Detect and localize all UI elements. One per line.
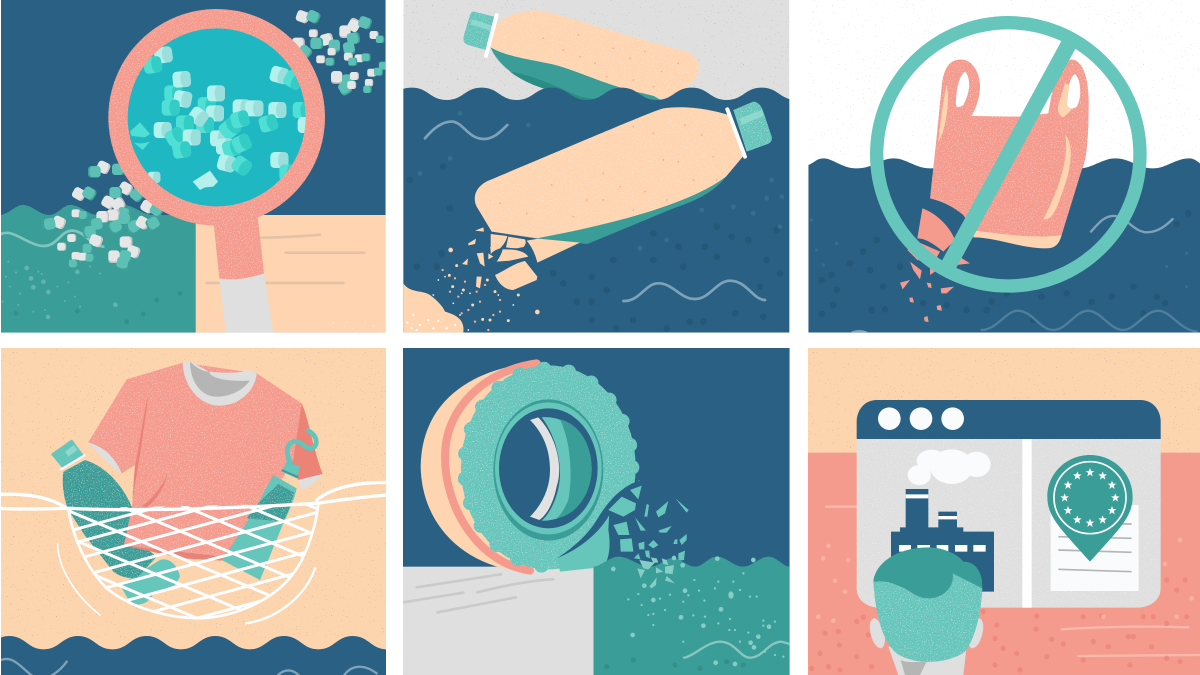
water with wave — [808, 158, 1200, 338]
panel: plastic bag crossed out — [808, 0, 1200, 338]
upper bottle — [463, 10, 699, 103]
t-shirt — [88, 361, 323, 561]
magnifier ring — [118, 19, 315, 216]
tyre crack and missing section — [557, 480, 640, 561]
sand panel with lines — [196, 215, 386, 333]
factory with smoke — [891, 449, 994, 592]
prohibition sign — [877, 23, 1140, 286]
tyre lower plain section — [557, 480, 639, 572]
tyre fragments — [608, 486, 689, 561]
browser window — [857, 400, 1161, 608]
panel: bottles breaking up in water — [377, 0, 797, 333]
panel: eroding tyre — [403, 348, 790, 675]
right bottle with twisted cord — [222, 431, 316, 580]
panel: net with recycled shirt and bottles — [0, 348, 388, 675]
document and location pin with stars — [1047, 455, 1139, 591]
ground with lines — [403, 567, 594, 675]
tyre side wall — [421, 363, 540, 573]
bag fragments — [900, 242, 970, 322]
plastic bag — [917, 59, 1089, 252]
water with droplets — [594, 557, 790, 675]
tyre tread — [461, 365, 636, 569]
left bottle — [52, 441, 180, 605]
sand heap — [403, 283, 464, 333]
broken bottle fragments — [433, 227, 580, 330]
lower bottle — [475, 102, 772, 244]
water with wave — [1, 205, 196, 333]
panel: magnifying glass over microplastic pellets — [1, 0, 388, 333]
water with wave — [377, 88, 797, 333]
tyre hole with inner rim — [493, 399, 603, 541]
fishing net — [1, 480, 386, 624]
magnifier handle — [213, 213, 273, 333]
viewer head from behind — [867, 547, 986, 675]
pink ground marks — [812, 507, 1200, 670]
lens with magnified pellets — [125, 26, 316, 209]
pellets drifting out — [42, 9, 388, 271]
water with wave — [0, 636, 387, 675]
panel: browser window with factory, EU pin and viewer — [808, 348, 1200, 675]
